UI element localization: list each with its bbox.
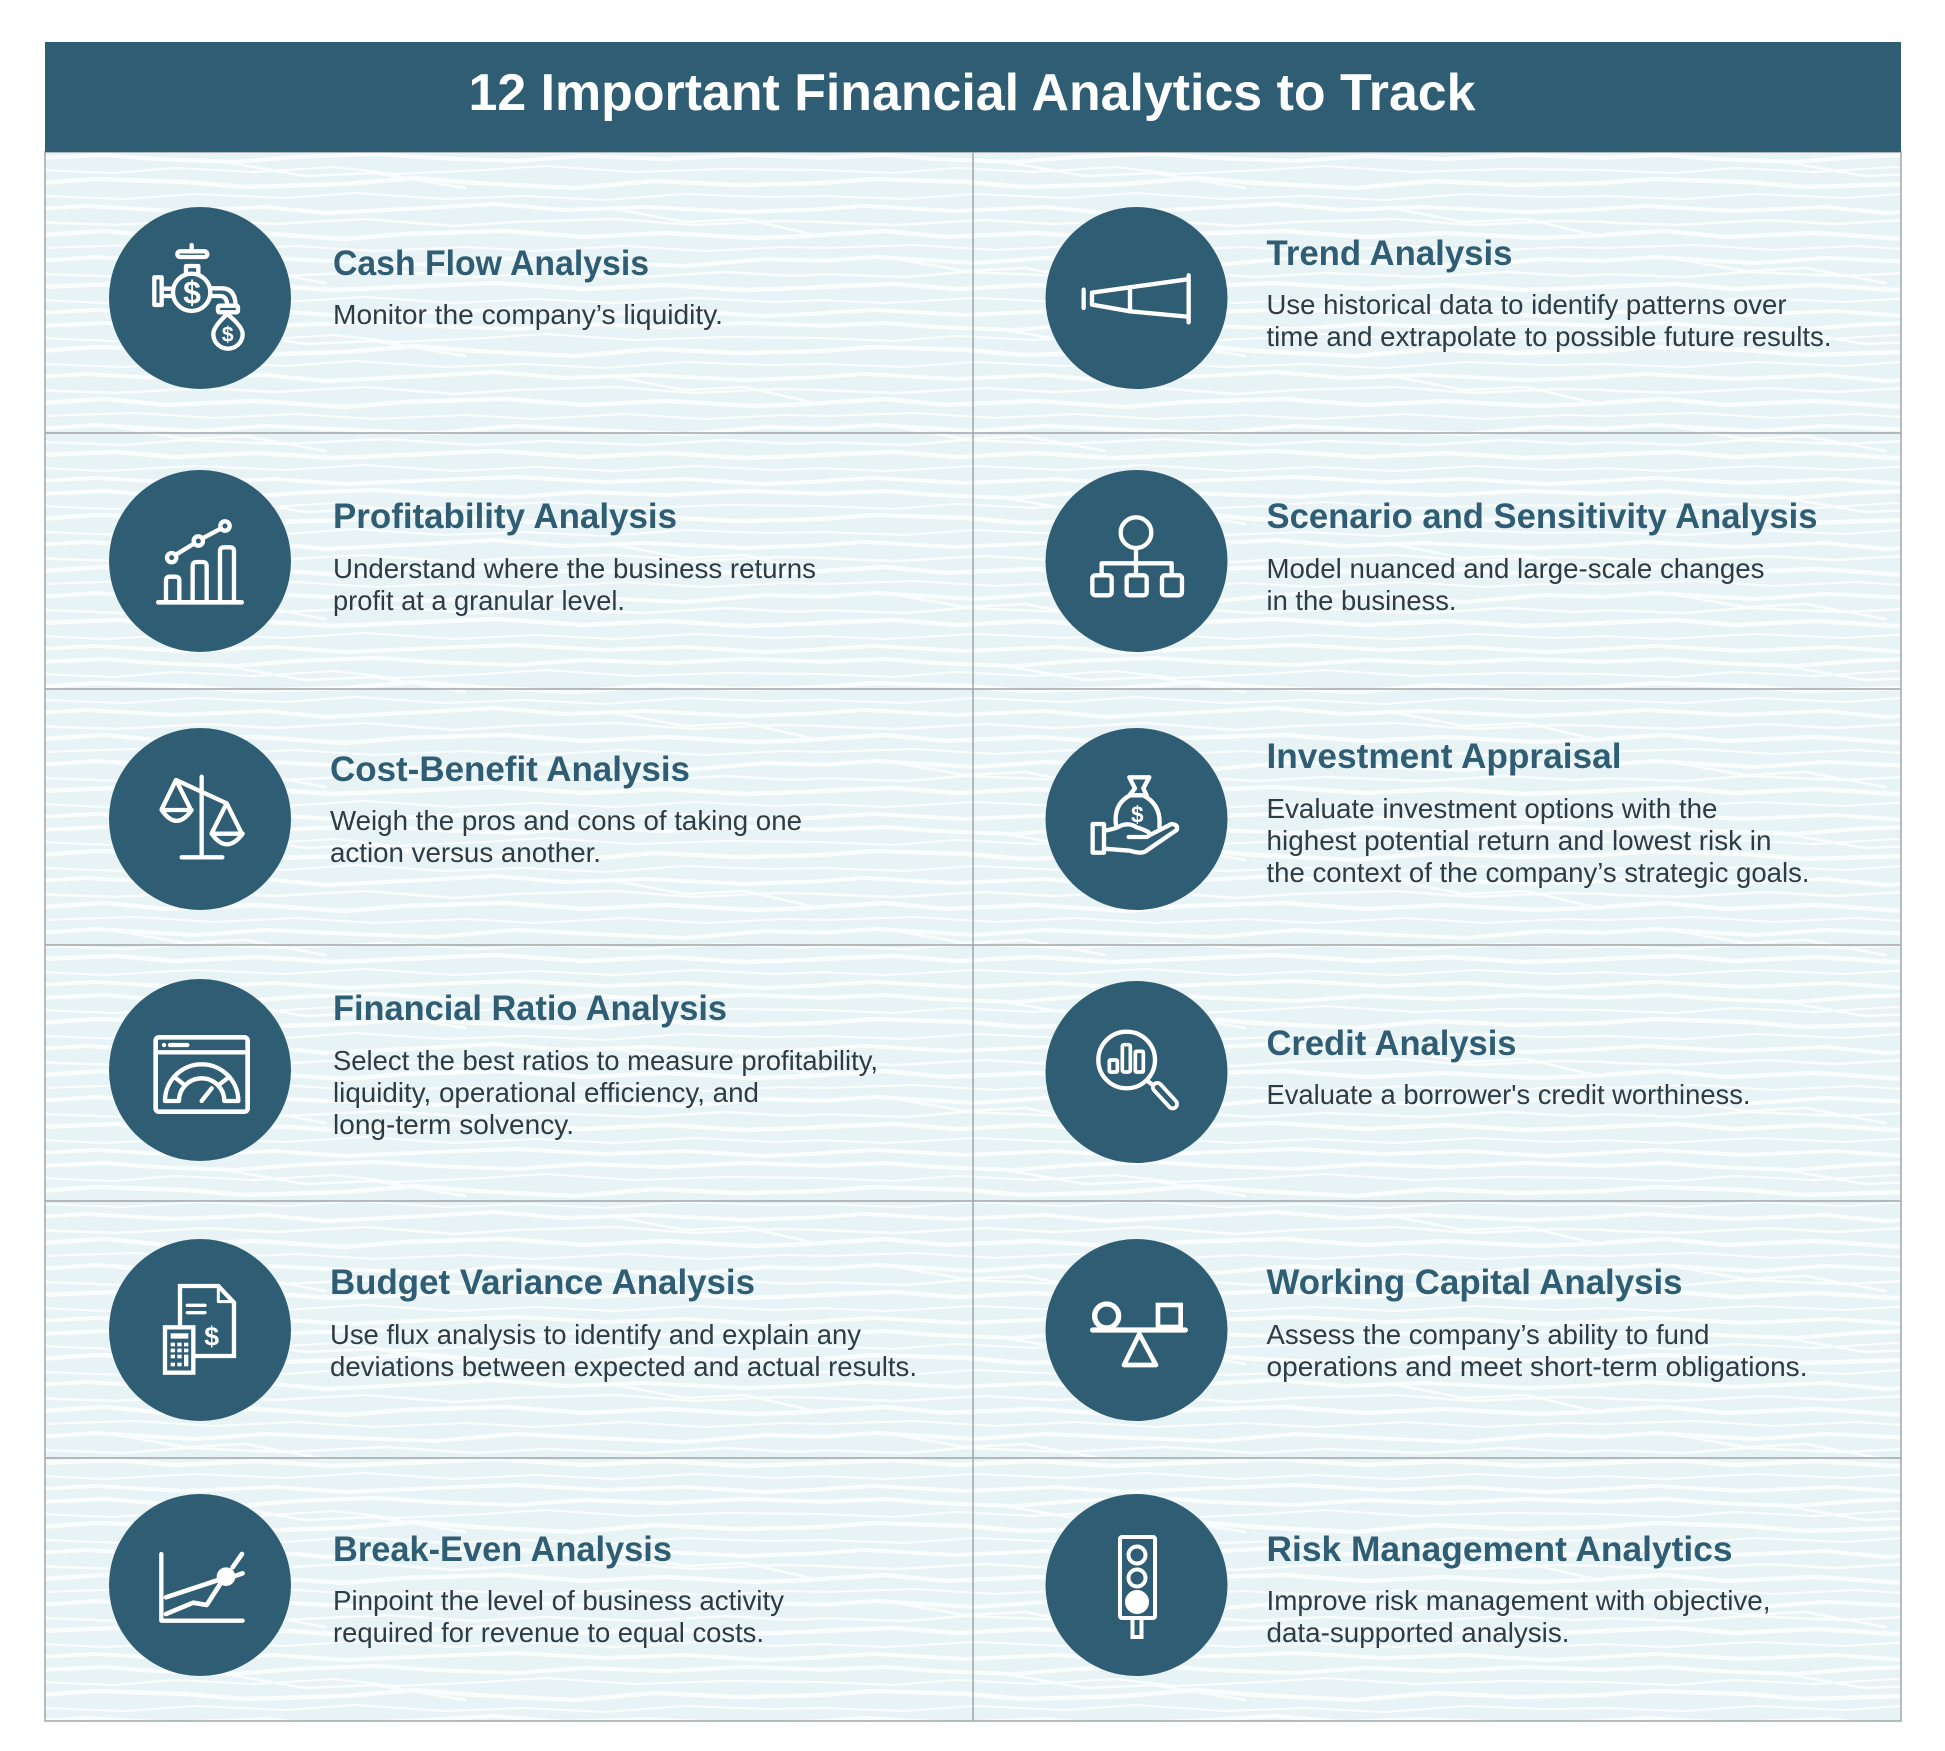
body text: action versus another. — [330, 837, 601, 868]
body text: Use historical data to identify patterns over — [1266, 289, 1786, 320]
title banner — [45, 42, 1901, 152]
icon: bar chart with trend line — [158, 521, 242, 602]
body text: the context of the company’s strategic goals. — [1266, 857, 1810, 888]
icon: break-even line chart — [161, 1554, 243, 1621]
icon: hand holding money bag — [1093, 777, 1177, 853]
body text: Model nuanced and large-scale changes — [1266, 553, 1764, 584]
panel: Risk Management Analytics — [1046, 1494, 1770, 1676]
icon: hand holding money bag: $ — [1131, 801, 1144, 827]
body text: Evaluate a borrower's credit worthiness. — [1266, 1079, 1750, 1110]
title banner: 12 Important Financial Analytics to Track — [468, 64, 1476, 122]
heading: Budget Variance Analysis — [330, 1263, 755, 1302]
body text: in the business. — [1266, 585, 1456, 616]
body text: highest potential return and lowest risk in — [1266, 825, 1772, 856]
body text: Understand where the business returns — [333, 553, 816, 584]
body text: Monitor the company’s liquidity. — [333, 299, 723, 330]
icon: dashboard gauge window — [156, 1037, 248, 1112]
body text: time and extrapolate to possible future results. — [1266, 321, 1832, 352]
heading: Cash Flow Analysis — [333, 244, 649, 283]
heading: Credit Analysis — [1266, 1024, 1516, 1063]
body text — [1266, 553, 1764, 616]
body text: Use flux analysis to identify and explain any — [330, 1319, 861, 1350]
body text — [330, 1319, 917, 1382]
panel: Cost-Benefit Analysis — [109, 728, 802, 910]
body text: required for revenue to equal costs. — [333, 1617, 764, 1648]
body text: Pinpoint the level of business activity — [333, 1585, 784, 1616]
heading: Working Capital Analysis — [1266, 1263, 1682, 1302]
icon: invoice and calculator — [165, 1286, 234, 1373]
icon: faucet dripping money — [154, 245, 243, 349]
icon: balance scale — [162, 777, 243, 857]
panel: Break-Even Analysis — [109, 1494, 784, 1676]
body text: liquidity, operational efficiency, and — [333, 1077, 759, 1108]
body text: Evaluate investment options with the — [1266, 793, 1718, 824]
body text: profit at a granular level. — [333, 585, 625, 616]
icon: invoice and calculator: $ — [204, 1321, 219, 1351]
panel: Profitability Analysis — [109, 470, 816, 652]
panel: Working Capital Analysis — [1046, 1239, 1808, 1421]
body text: long-term solvency. — [333, 1109, 574, 1140]
panel: Budget Variance Analysis — [109, 1239, 917, 1421]
panel: Cash Flow Analysis — [109, 207, 723, 389]
body text — [330, 805, 802, 868]
body text: data-supported analysis. — [1266, 1617, 1570, 1648]
heading: Scenario and Sensitivity Analysis — [1266, 497, 1818, 536]
panel: Financial Ratio Analysis — [109, 979, 878, 1161]
heading: Risk Management Analytics — [1266, 1530, 1732, 1569]
heading: Profitability Analysis — [333, 497, 677, 536]
icon: magnifier over bar chart — [1098, 1032, 1173, 1104]
heading: Investment Appraisal — [1266, 737, 1622, 776]
body text: operations and meet short-term obligations. — [1266, 1351, 1808, 1382]
icon: faucet dripping money: $ — [183, 274, 201, 310]
body text: Improve risk management with objective, — [1266, 1585, 1770, 1616]
body text: Select the best ratios to measure profitability, — [333, 1045, 878, 1076]
icon: hierarchy diagram — [1092, 517, 1182, 595]
panel: Investment Appraisal — [1046, 728, 1810, 910]
panel: Credit Analysis — [1046, 981, 1750, 1163]
heading: Trend Analysis — [1266, 234, 1512, 273]
body text — [1266, 289, 1832, 352]
heading: Cost-Benefit Analysis — [330, 750, 690, 789]
body text: Assess the company’s ability to fund — [1266, 1319, 1710, 1350]
panel: Scenario and Sensitivity Analysis — [1046, 470, 1818, 652]
body text: deviations between expected and actual results. — [330, 1351, 917, 1382]
body text — [1266, 793, 1810, 888]
body text — [333, 553, 816, 616]
heading: Break-Even Analysis — [333, 1530, 672, 1569]
icon: faucet dripping money: $ — [222, 322, 234, 346]
body text — [1266, 1319, 1808, 1382]
icon: telescope — [1084, 275, 1189, 322]
panel: Trend Analysis — [1046, 207, 1832, 389]
body text — [1266, 1585, 1770, 1648]
icon: traffic light — [1120, 1537, 1155, 1637]
heading: Financial Ratio Analysis — [333, 989, 727, 1028]
body text — [333, 1585, 784, 1648]
body text: Weigh the pros and cons of taking one — [330, 805, 802, 836]
body text — [333, 1045, 878, 1140]
icon: seesaw balance — [1093, 1304, 1185, 1365]
